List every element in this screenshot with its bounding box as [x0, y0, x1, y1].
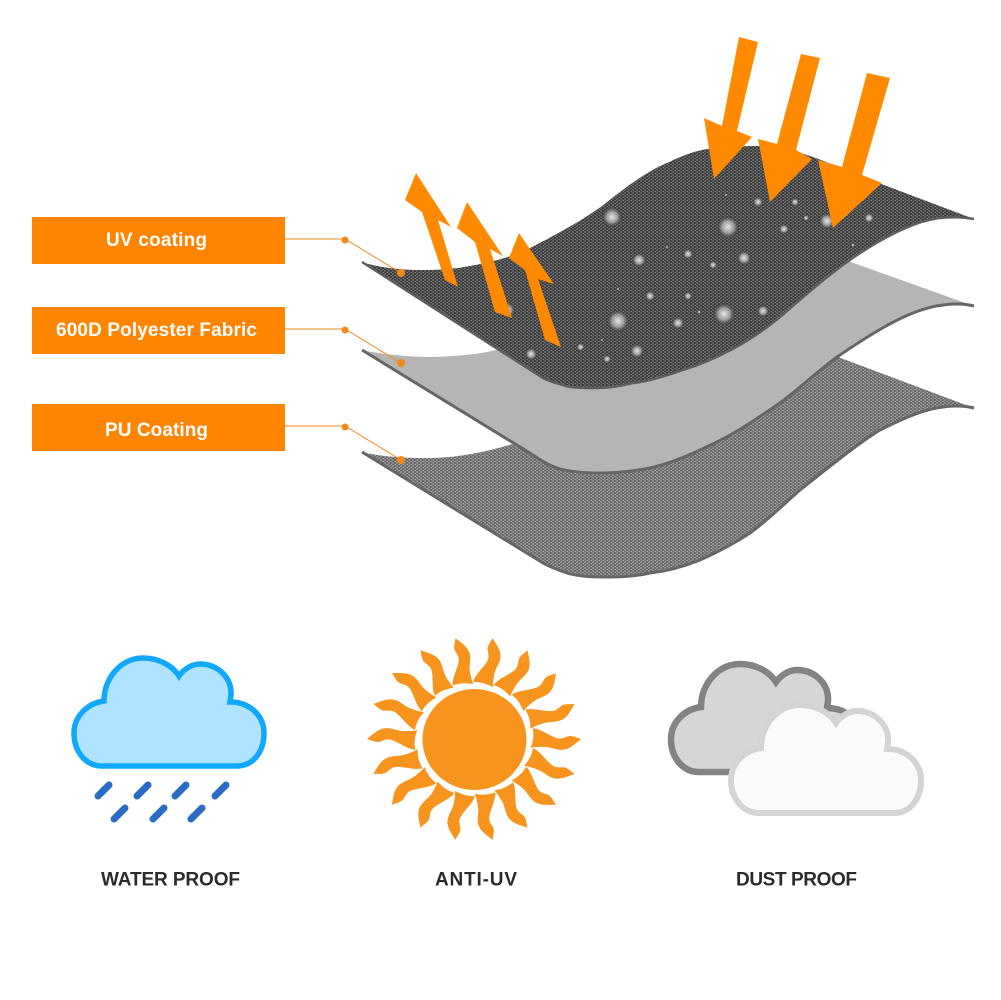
- caption: dust proof: DUST PROOF: [736, 870, 857, 890]
- leader line: 600D Polyester Fabric: [285, 326, 405, 367]
- caption: anti-UV: ANTI-UV: [435, 870, 517, 890]
- label: 600D Polyester Fabric: 600D Polyester Fabric: [56, 320, 257, 341]
- label: 600D Polyester Fabric: [32, 307, 285, 354]
- caption: water proof: WATER PROOF: [101, 870, 240, 890]
- water droplets: [499, 194, 874, 363]
- leader line: PU Coating: [285, 424, 405, 464]
- layer: 600D polyester fabric: [362, 261, 974, 473]
- label: UV coating: UV coating: [106, 230, 207, 251]
- sun rays: [367, 636, 581, 842]
- label: UV coating: [32, 217, 285, 264]
- layer: UV coating: [362, 146, 974, 388]
- arrows: downward, incoming rain: [704, 37, 890, 228]
- icon: rain cloud: [74, 658, 264, 819]
- layer: PU coating: [362, 357, 974, 577]
- fabric layer diagram: [362, 146, 974, 577]
- arrows: upward, breathable vapour: [405, 173, 561, 347]
- leader line: UV coating: [285, 236, 405, 277]
- label: PU Coating: PU Coating: [105, 420, 208, 441]
- front light cloud: [731, 705, 921, 813]
- icon: dust clouds: [671, 664, 921, 813]
- back grey cloud: [671, 664, 861, 772]
- icon: sun: [367, 636, 581, 842]
- rain drops: [98, 785, 226, 819]
- label: PU Coating: [32, 404, 285, 451]
